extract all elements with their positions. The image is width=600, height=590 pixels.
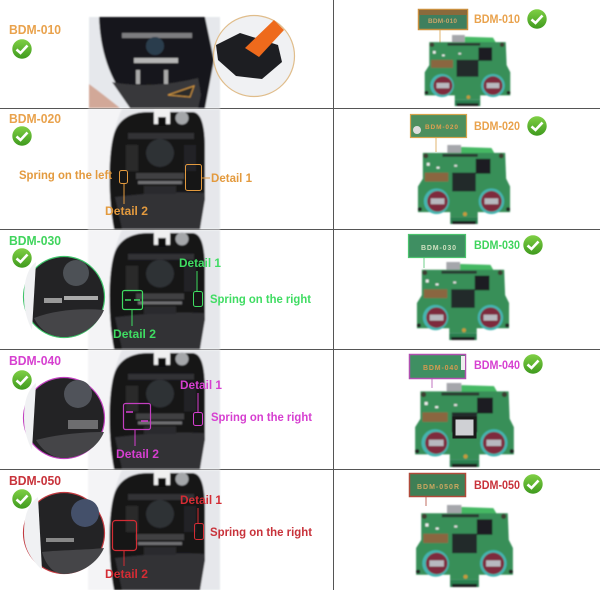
- callout circle: zoomed detail: [24, 256, 104, 338]
- annotation: detail 1 and spring: Spring on the right: [210, 525, 312, 539]
- icon: check mark right: [523, 474, 543, 494]
- callout circle: pry tool: [214, 16, 294, 96]
- annotation: detail 2: [105, 184, 148, 218]
- callout circle: zoomed detail: [24, 378, 104, 458]
- row: BDM-040: [9, 350, 543, 469]
- photo: controller back: [88, 109, 220, 229]
- annotation: detail 1 and spring: Spring on the right: [210, 292, 311, 306]
- heading: BDM-030: BDM-030: [9, 233, 61, 248]
- annotation: detail 1: Detail 1: [211, 171, 252, 185]
- label inset: BDM-050R: [410, 474, 466, 506]
- icon: check mark: [12, 126, 32, 146]
- annotation: detail 2: [113, 290, 156, 341]
- heading: BDM-010 right: BDM-010: [474, 14, 520, 26]
- row: BDM-050: [9, 470, 543, 590]
- annotation: detail 1 and spring: Detail 1: [179, 256, 221, 270]
- heading: BDM-040 right: BDM-040: [474, 360, 520, 372]
- label inset: BDM-040: [410, 354, 466, 388]
- label inset: BDM-020: [410, 114, 466, 152]
- heading: BDM-020: BDM-020: [9, 111, 61, 126]
- label inset: BDM-030: [408, 234, 466, 268]
- icon: check mark: [12, 39, 32, 59]
- row: BDM-010: [9, 9, 547, 108]
- annotation: detail 2: [105, 520, 148, 581]
- photo: controller back: [88, 230, 220, 349]
- photo: opened controller trigger: [89, 17, 220, 108]
- heading: BDM-040: BDM-040: [9, 353, 61, 368]
- icon: check mark: [12, 248, 32, 268]
- annotation: detail 2: Detail 2: [105, 204, 148, 218]
- annotation: detail 1 and spring: Spring on the right: [211, 410, 312, 424]
- annotation: detail 1 and spring: [180, 493, 312, 540]
- annotation: detail 2: Detail 2: [113, 327, 156, 341]
- callout circle: zoomed detail: [24, 492, 104, 574]
- label inset: BDM-030: BDM-030: [421, 245, 456, 252]
- label inset: BDM-010: BDM-010: [428, 18, 457, 25]
- circuit board: [415, 383, 514, 467]
- icon: check mark right: [527, 9, 547, 29]
- circuit board: [418, 145, 510, 224]
- heading: BDM-050: BDM-050: [9, 473, 61, 488]
- annotation: detail 1 and spring: [179, 256, 311, 306]
- annotation: detail 1 and spring: Detail 1: [180, 493, 222, 507]
- icon: check mark: [12, 370, 32, 390]
- photo: controller back: [88, 350, 220, 469]
- annotation: detail 2: [116, 404, 159, 461]
- annotation: spring on the left: Spring on the left: [19, 168, 112, 182]
- heading: BDM-050 right: BDM-050: [474, 480, 520, 492]
- label inset: BDM-010: [418, 10, 468, 62]
- annotation: detail 2: Detail 2: [116, 447, 159, 461]
- label inset: BDM-020: BDM-020: [425, 124, 458, 131]
- icon: check mark: [12, 489, 32, 509]
- photo: controller back: [88, 470, 220, 590]
- heading: BDM-030 right: BDM-030: [474, 240, 520, 252]
- annotation: detail 1 and spring: Detail 1: [180, 378, 222, 392]
- icon: check mark right: [523, 235, 543, 255]
- circuit board: [417, 262, 509, 340]
- row: BDM-020: [9, 109, 547, 229]
- annotation: detail 1 and spring: [180, 378, 312, 426]
- speaker on board: [454, 418, 475, 437]
- heading: BDM-020 right: BDM-020: [474, 121, 520, 133]
- label inset: BDM-050R: BDM-050R: [417, 484, 459, 491]
- annotation: detail 2: Detail 2: [105, 567, 148, 581]
- icon: check mark right: [523, 354, 543, 374]
- annotation: detail 1: [186, 164, 252, 190]
- label inset: BDM-040: BDM-040: [423, 365, 458, 372]
- heading: BDM-010: BDM-010: [9, 22, 61, 37]
- row: BDM-030: [9, 230, 543, 349]
- circuit board: [425, 35, 510, 106]
- circuit board: [416, 505, 513, 587]
- icon: check mark right: [527, 116, 547, 136]
